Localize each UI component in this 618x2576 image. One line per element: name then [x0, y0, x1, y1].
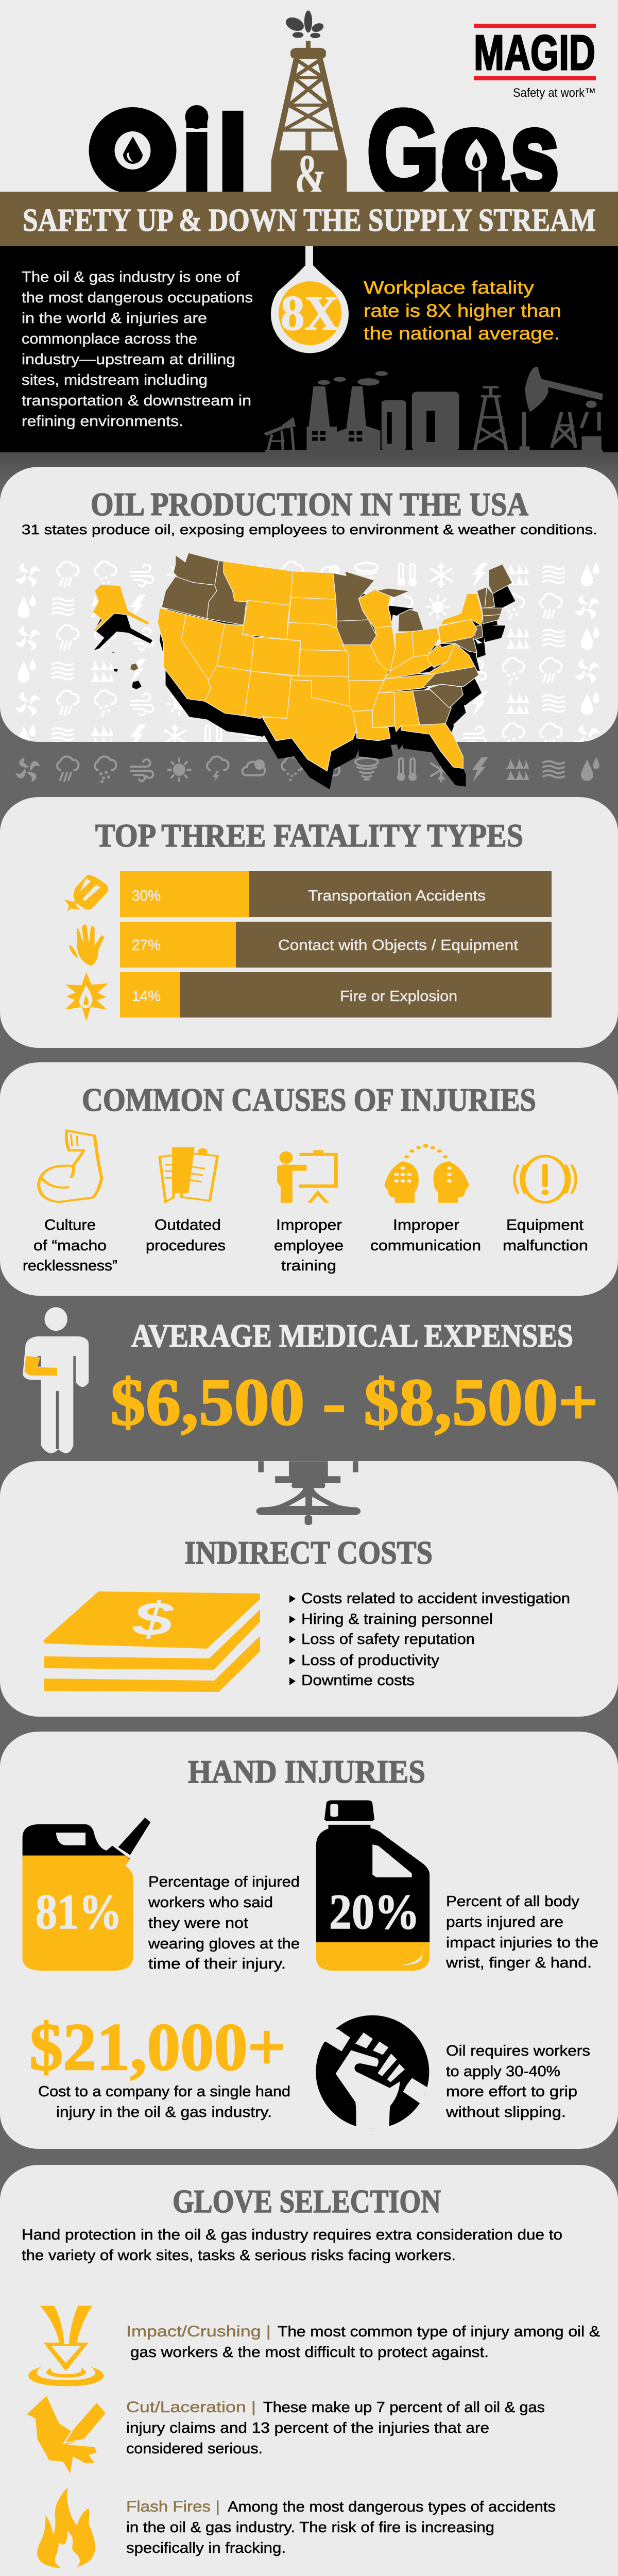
bar: fire or explosion 14%: 14% — [132, 988, 161, 1005]
item: flash fires: Flash Fires | — [126, 2498, 220, 2515]
intro text block: The oil & gas industry is one of — [22, 269, 240, 285]
text: gloves statistic: time of their injury. — [148, 1956, 286, 1972]
bar: fire or explosion 14%: Fire or Explosion — [340, 988, 457, 1005]
icon: clipboards — [160, 1148, 217, 1202]
logo: Magid: Safety at work™ — [513, 86, 596, 100]
title word: Gas: G — [367, 86, 439, 218]
label: culture of macho recklessness: of “macho — [33, 1238, 107, 1254]
fatality rate callout: rate is 8X higher than — [364, 301, 561, 321]
map: oil producing states — [93, 553, 512, 771]
label: improper communication: communication — [370, 1238, 481, 1254]
list: indirect cost items: Loss of safety reputation — [301, 1631, 475, 1648]
heading: oil production: OIL PRODUCTION IN THE USA — [91, 486, 528, 522]
item: flash fires — [126, 2498, 556, 2556]
label: equipment malfunction — [503, 1217, 588, 1254]
item: cut laceration: injury claims and 13 percent of the injuries that are — [126, 2420, 489, 2436]
intro text block: transportation & downstream in — [22, 393, 251, 409]
text: gloves statistic — [148, 1874, 300, 1972]
icon: impact arrow — [28, 2306, 104, 2386]
icon: flame — [37, 2487, 95, 2568]
text: gloves statistic: Percentage of injured — [148, 1874, 300, 1890]
icon: cut hand — [27, 2396, 106, 2473]
item: cut laceration: considered serious. — [126, 2441, 263, 2457]
figure: cost of a hand injury: $21,000+ — [29, 2010, 286, 2084]
intro text block: in the world & injuries are — [22, 310, 207, 327]
icon: refinery skyline — [265, 367, 603, 452]
text: grip effort: to apply 30-40% — [446, 2063, 560, 2080]
text: gloves statistic: they were not — [148, 1915, 248, 1931]
label: culture of macho recklessness: recklessness” — [23, 1258, 117, 1274]
panel: oil production in the USA — [0, 467, 618, 783]
item: flash fires: in the oil & gas industry. The risk of fire is increasing — [126, 2519, 494, 2536]
title word: Gas: s — [510, 87, 559, 217]
label: equipment malfunction: Equipment — [506, 1217, 583, 1233]
text: grip effort — [445, 2043, 590, 2121]
bar: fire or explosion 14% — [120, 972, 552, 1018]
icon: wheelchair base — [256, 1461, 360, 1525]
item: cut laceration — [126, 2399, 545, 2457]
oil drop with 8X: 8X — [281, 285, 339, 341]
item: cut laceration: These make up 7 percent of all oil & gas — [263, 2399, 545, 2416]
icon: jerry can with 81% — [23, 1818, 150, 1971]
item: flash fires: Among the most dangerous types of accidents — [228, 2499, 556, 2515]
label: equipment malfunction: malfunction — [503, 1238, 588, 1254]
bar: contact with objects 27%: 27% — [132, 937, 161, 954]
item: flash fires: specifically in fracking. — [126, 2540, 286, 2556]
label: outdated procedures: Outdated — [154, 1217, 221, 1233]
weather icon pattern on grey band — [15, 756, 599, 783]
panel: top three fatality types — [0, 797, 618, 1048]
logo: Magid — [474, 24, 596, 100]
title word: Oil: O — [88, 87, 178, 217]
icon: injured person with sling — [23, 1307, 89, 1453]
item: cut laceration: Cut/Laceration | — [126, 2399, 256, 2416]
icon: flexed arm — [39, 1130, 101, 1202]
text: grip effort: more effort to grip — [446, 2083, 577, 2100]
panel: indirect costs — [0, 1461, 618, 1717]
subtitle band — [0, 192, 618, 246]
fatality rate callout — [364, 278, 561, 344]
label: improper employee training: employee — [274, 1238, 344, 1254]
bar: transportation accidents 30%: 30% — [132, 888, 161, 904]
title word: Gas — [367, 86, 559, 218]
figure: cost of a hand injury: Cost to a company for a single hand — [38, 2083, 290, 2100]
label: outdated procedures: procedures — [146, 1238, 226, 1254]
icon: oil bottle with 20%: 20% — [329, 1884, 420, 1939]
intro text block — [22, 269, 253, 430]
label: culture of macho recklessness: Culture — [44, 1217, 96, 1233]
icon: money stack — [43, 1591, 260, 1692]
text: grip effort: Oil requires workers — [446, 2043, 590, 2059]
intro text block: refining environments. — [22, 413, 183, 430]
fatality rate callout: the national average. — [364, 324, 560, 344]
figure: cost of a hand injury — [29, 2010, 290, 2121]
panel: glove selection — [0, 2165, 618, 2576]
heading: hand injuries: HAND INJURIES — [188, 1753, 425, 1790]
title word: Gas: a — [441, 87, 508, 217]
header panel: title with derrick — [0, 0, 618, 246]
icon: oil derrick with gusher: & — [295, 143, 327, 208]
text: gloves statistic: wearing gloves at the — [148, 1936, 300, 1952]
intro text block: the most dangerous occupations — [22, 290, 253, 306]
heading: indirect costs: INDIRECT COSTS — [184, 1534, 433, 1571]
subheading: 31 states: 31 states produce oil, exposing employees to environment & weather conditions. — [22, 522, 597, 537]
intro text: hand protection — [22, 2227, 562, 2264]
icon: oil bottle with 20% — [316, 1800, 430, 1971]
panel: average medical expenses — [23, 1307, 598, 1453]
heading: glove selection: GLOVE SELECTION — [173, 2183, 441, 2219]
intro panel: black — [0, 246, 618, 452]
label: improper employee training: training — [281, 1258, 336, 1274]
title word: Oil — [88, 87, 248, 217]
icon: hand — [69, 924, 105, 965]
intro text: hand protection: Hand protection in the oil & gas industry requires extra consideration due to — [22, 2227, 562, 2243]
bar: transportation accidents 30% — [120, 871, 552, 917]
text: impact injuries statistic: parts injured are — [446, 1914, 563, 1930]
bar: contact with objects 27% — [120, 922, 552, 968]
bar: contact with objects 27%: Contact with Objects / Equipment — [278, 937, 518, 954]
title word: Oil: i — [182, 94, 212, 215]
fatality rate callout: Workplace fatality — [364, 278, 535, 298]
band shading under intro — [0, 452, 618, 488]
panel: hand injuries — [0, 1732, 618, 2149]
list: indirect cost items: Downtime costs — [301, 1672, 415, 1689]
icon: explosion burst — [65, 972, 108, 1022]
text: impact injuries statistic: impact injuries to the — [446, 1935, 598, 1951]
title word: Oil: l — [218, 94, 248, 215]
icon: jerry can with 81%: 81% — [36, 1884, 122, 1939]
intro text block: sites, midstream including — [22, 372, 208, 388]
list: indirect cost items: Hiring & training personnel — [301, 1611, 493, 1628]
panel: common causes of injuries — [0, 1062, 618, 1296]
icon: overturned car — [64, 875, 108, 911]
text: impact injuries statistic — [445, 1893, 598, 1971]
item: impact crushing: Impact/Crushing | — [126, 2323, 271, 2340]
icon: two heads communicating — [384, 1144, 469, 1203]
text: grip effort: without slipping. — [445, 2104, 566, 2121]
label: improper employee training: Improper — [276, 1217, 342, 1233]
icon: presenter — [277, 1150, 338, 1203]
heading: fatality types: TOP THREE FATALITY TYPES — [95, 817, 523, 854]
text: impact injuries statistic: wrist, finger & hand. — [445, 1955, 592, 1971]
label: improper employee training — [274, 1217, 344, 1274]
list: indirect cost items: Costs related to accident investigation — [301, 1590, 570, 1607]
list: indirect cost items: Loss of productivity — [301, 1652, 440, 1669]
item: impact crushing: The most common type of injury among oil & — [278, 2324, 600, 2340]
weather icon pattern on panel — [15, 562, 599, 750]
icon: equipment warning — [514, 1156, 576, 1202]
label: improper communication — [370, 1217, 481, 1254]
icon: money stack: $ — [132, 1593, 174, 1646]
intro text block: industry—upstream at drilling — [22, 351, 235, 368]
figure: cost of a hand injury: injury in the oil & gas industry. — [56, 2104, 272, 2121]
label: culture of macho recklessness — [23, 1217, 117, 1274]
item: impact crushing: gas workers & the most difficult to protect against. — [130, 2344, 489, 2361]
label: outdated procedures — [146, 1217, 226, 1254]
icon: oil derrick with gusher — [271, 10, 347, 208]
item: impact crushing — [126, 2323, 600, 2361]
figure: cost range: $6,500 - $8,500+ — [110, 1365, 598, 1439]
intro text block: commonplace across the — [22, 331, 197, 347]
bar: transportation accidents 30%: Transportation Accidents — [308, 888, 486, 904]
text: gloves statistic: workers who said — [148, 1894, 273, 1911]
text: impact injuries statistic: Percent of all body — [446, 1893, 580, 1910]
list: indirect cost items — [289, 1590, 570, 1689]
icon: fist gripping wrench — [313, 2015, 429, 2129]
oil drop with 8X — [271, 246, 349, 353]
heading: common causes: COMMON CAUSES OF INJURIES — [82, 1081, 536, 1118]
intro text: hand protection: the variety of work sites, tasks & serious risks facing workers. — [22, 2247, 456, 2264]
label: improper communication: Improper — [393, 1217, 459, 1233]
